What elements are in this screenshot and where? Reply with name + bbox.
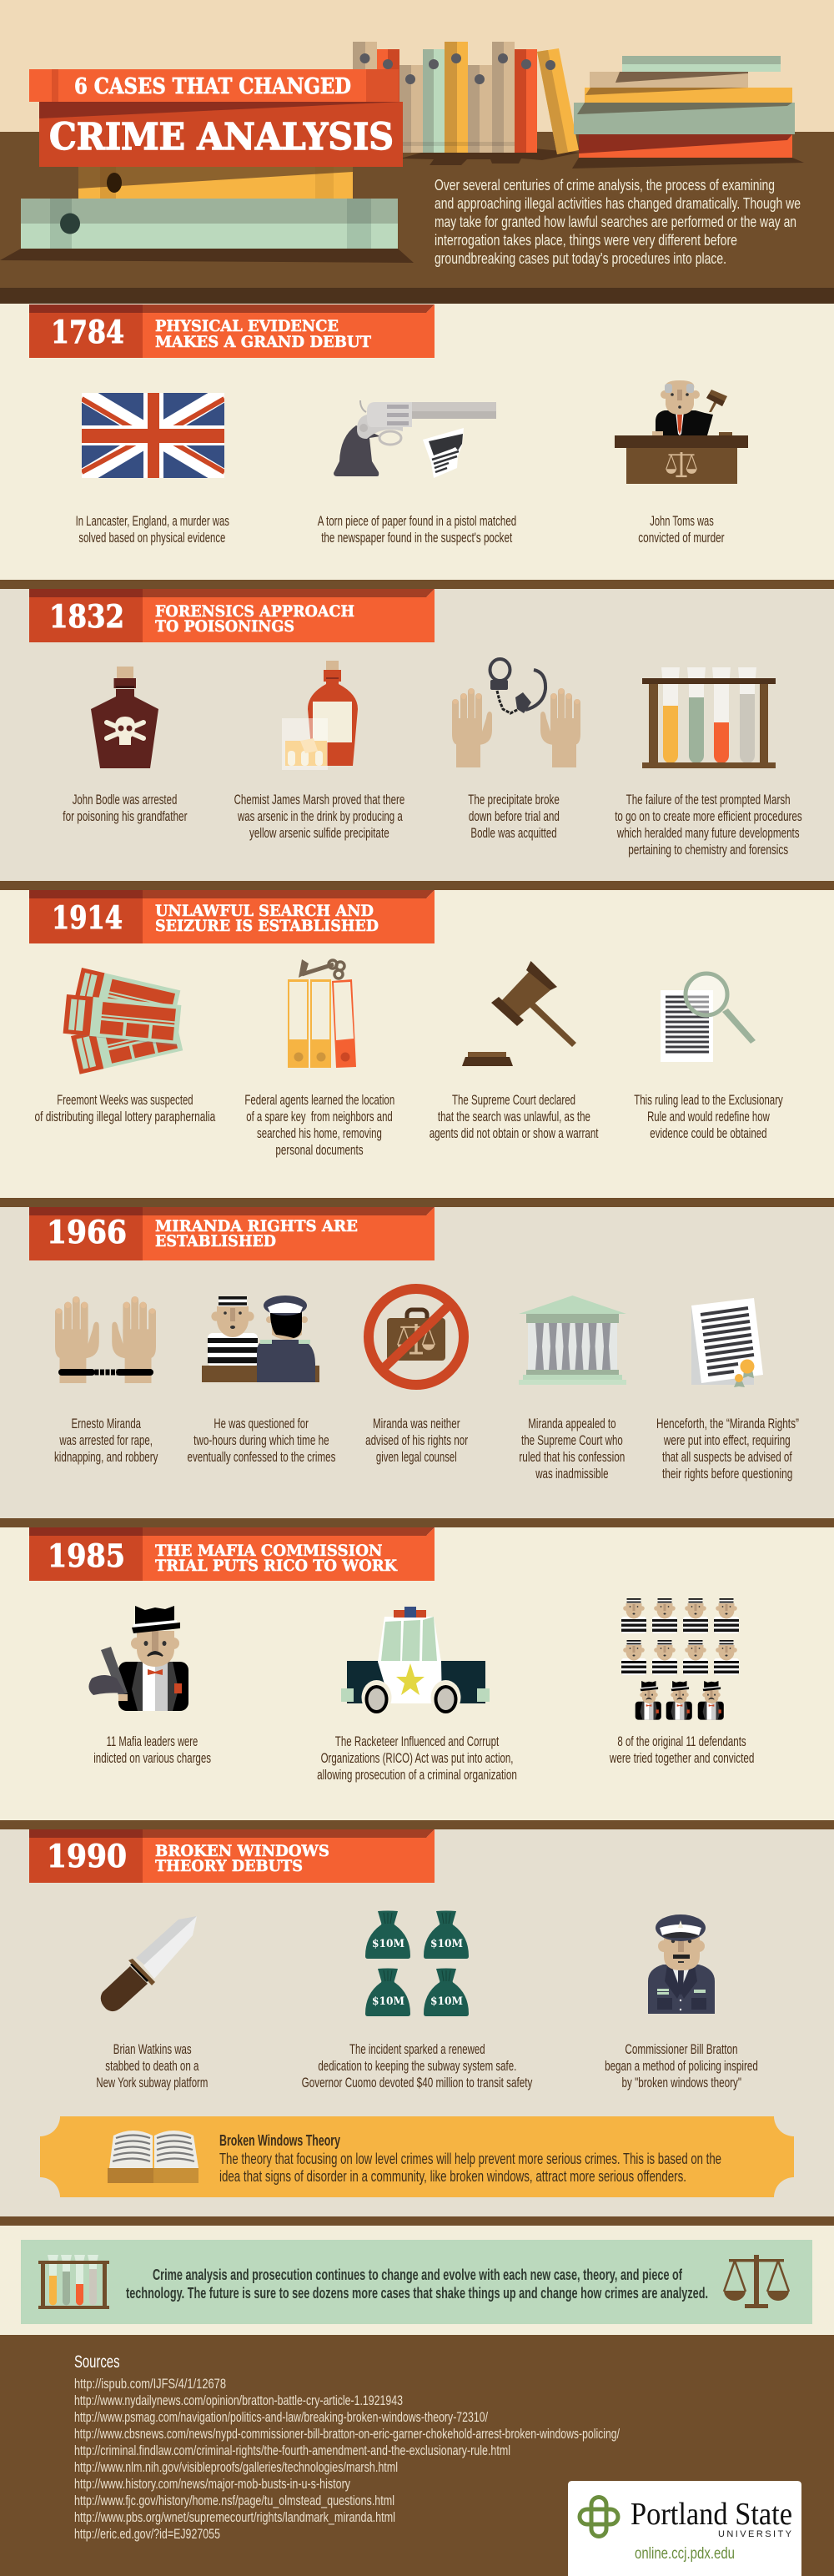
captions 1966: was arrested for rape,	[59, 1432, 153, 1448]
conclusion text	[126, 2267, 708, 2302]
icon: judge at bench	[615, 380, 748, 484]
captions 1914: The Supreme Court declared	[452, 1092, 575, 1108]
captions 1990: The incident sparked a renewed	[349, 2041, 485, 2057]
callout: Broken Windows Theory: Broken Windows Theory	[219, 2132, 340, 2149]
captions 1914: searched his home, removing	[257, 1125, 382, 1141]
heading: 1914: 1914	[52, 899, 123, 936]
captions 1832: was arsenic in the drink by producing a	[237, 808, 403, 824]
captions 1832: for poisoning his grandfather	[63, 808, 188, 824]
icon: test tubes rack	[642, 667, 776, 768]
captions 1985: The Racketeer Influenced and Corrupt	[335, 1733, 499, 1749]
captions 1990: New York subway platform	[96, 2075, 208, 2090]
panel: 1985	[0, 1527, 834, 1829]
icon: document and magnifier	[661, 974, 756, 1062]
heading: 1990: THEORY DEBUTS	[155, 1857, 303, 1875]
icon: stacked books right	[572, 56, 804, 169]
captions 1914: of distributing illegal lottery paraphernalia	[35, 1109, 216, 1124]
captions 1990: began a method of policing inspired	[605, 2058, 758, 2074]
captions 1966: advised of his rights nor	[365, 1432, 468, 1448]
icon: money bags: $10M	[430, 1995, 463, 2008]
heading: 1990	[29, 1829, 435, 1883]
sources list: http://www.pbs.org/wnet/supremecourt/rights/landmark_miranda.html	[74, 2510, 395, 2525]
icon: money bags	[365, 1910, 469, 2016]
captions 1966	[54, 1416, 799, 1482]
icon: signed document	[691, 1298, 763, 1387]
icon: poison bottle	[91, 667, 158, 768]
icon: defendants grid	[621, 1598, 739, 1720]
icon: gavel	[462, 961, 576, 1066]
captions 1966: was inadmissible	[535, 1466, 609, 1482]
sources list: http://www.history.com/news/major-mob-busts-in-u-s-history	[74, 2477, 351, 2492]
icon: mafia boss with gun	[88, 1606, 188, 1711]
heading: 1966: 1966	[47, 1214, 127, 1250]
icon: bottle and glass	[282, 661, 358, 770]
icon: knife	[101, 1916, 197, 2011]
panel: 1784	[0, 304, 834, 589]
captions 1784: convicted of murder	[638, 530, 725, 546]
heading: 1990: BROKEN WINDOWS	[155, 1842, 329, 1860]
icon: no legal counsel sign	[369, 1289, 464, 1385]
heading: 1914	[29, 890, 435, 943]
sources list: http://www.nlm.nih.gov/visibleproofs/galleries/technologies/marsh.html	[74, 2460, 398, 2475]
sources list: http://www.nydailynews.com/opinion/bratton-battle-cry-article-1.1921943	[74, 2393, 403, 2408]
icon: pistol and torn newspaper	[334, 400, 496, 478]
captions 1914: Rule and would redefine how	[647, 1109, 770, 1124]
panel: 1966	[0, 1207, 834, 1527]
icon: lottery tickets	[63, 968, 183, 1074]
panel: 1990	[0, 1829, 834, 2226]
title	[29, 69, 403, 167]
intro text	[435, 177, 801, 267]
captions 1966: Ernesto Miranda	[72, 1416, 141, 1431]
captions 1966: eventually confessed to the crimes	[187, 1449, 335, 1465]
captions 1914: Federal agents learned the location	[244, 1092, 394, 1108]
captions 1914: personal documents	[275, 1142, 364, 1158]
logo: Portland State University: UNIVERSITY	[718, 2529, 792, 2539]
captions 1914: that the search was unlawful, as the	[438, 1109, 590, 1124]
captions 1985: 8 of the original 11 defendants	[617, 1733, 746, 1749]
panel: 1832	[0, 589, 834, 890]
captions 1990: Brian Watkins was	[113, 2041, 192, 2057]
heading: 1784: PHYSICAL EVIDENCE	[155, 317, 339, 335]
captions 1985: Organizations (RICO) Act was put into action,	[321, 1750, 514, 1766]
heading: 1832: 1832	[49, 598, 124, 635]
sources list: Sources	[74, 2352, 120, 2372]
captions 1966: given legal counsel	[376, 1449, 457, 1465]
icon: open book	[108, 2131, 198, 2183]
intro text: interrogation takes place, things were very different before	[435, 232, 737, 249]
captions 1832: Chemist James Marsh proved that there	[234, 792, 404, 808]
heading: 1784	[29, 304, 435, 358]
sources list: http://www.psmag.com/navigation/politics-and-law/breaking-broken-windows-theory-72310/	[74, 2410, 488, 2425]
heading: 1784: MAKES A GRAND DEBUT	[155, 333, 371, 351]
intro text: groundbreaking cases put today's procedures into place.	[435, 250, 726, 267]
sources list: http://www.fjc.gov/history/home.nsf/page/tu_olmstead_questions.html	[74, 2493, 394, 2508]
captions 1990: Commissioner Bill Bratton	[625, 2041, 738, 2057]
captions 1966: He was questioned for	[214, 1416, 309, 1431]
sources list: http://www.cbsnews.com/news/nypd-commissioner-bill-bratton-on-eric-garner-chokehold-arrest-broken-windows-policing/	[74, 2427, 620, 2442]
icon: money bags: $10M	[372, 1995, 404, 2008]
icon: binders and key	[288, 959, 356, 1068]
heading: 1832	[29, 589, 435, 642]
icon: UK flag	[82, 393, 224, 478]
captions 1990: Governor Cuomo devoted $40 million to transit safety	[302, 2075, 533, 2090]
icon: stacked books left	[0, 167, 414, 263]
header panel	[0, 0, 834, 304]
captions 1990: dedication to keeping the subway system safe.	[318, 2058, 516, 2074]
heading: 1985: TRIAL PUTS RICO TO WORK	[155, 1557, 398, 1575]
logo: Portland State University: Portland State	[631, 2497, 792, 2532]
icon: knot emblem	[580, 2498, 618, 2536]
logo: Portland State University: online.ccj.pdx.edu	[635, 2545, 735, 2563]
sources list: http://criminal.findlaw.com/criminal-rights/the-fourth-amendment-and-the-exclusionary-rule.html	[74, 2443, 510, 2458]
icon: small test tubes	[38, 2255, 109, 2309]
panel: 1914	[0, 890, 834, 1207]
captions 1966: ruled that his confession	[519, 1449, 625, 1465]
captions 1966: Miranda was neither	[373, 1416, 460, 1431]
captions 1990: by "broken windows theory"	[622, 2075, 741, 2090]
callout: Broken Windows Theory: idea that signs of disorder in a community, like broken windows, attract more serious offenders.	[219, 2168, 686, 2185]
captions 1966: the Supreme Court who	[521, 1432, 623, 1448]
heading: 1966: ESTABLISHED	[155, 1232, 276, 1250]
heading: 1832: FORENSICS APPROACH	[155, 602, 354, 621]
captions 1832: Bodle was acquitted	[470, 825, 557, 841]
title: CRIME ANALYSIS	[49, 116, 394, 158]
captions 1784: solved based on physical evidence	[78, 530, 225, 546]
captions 1784	[76, 513, 725, 546]
captions 1966: two-hours during which time he	[193, 1432, 329, 1448]
icon: cuffed hands	[55, 1296, 156, 1383]
icon: money bags: $10M	[430, 1938, 463, 1950]
title: 6 CASES THAT CHANGED	[74, 74, 351, 99]
captions 1985: 11 Mafia leaders were	[107, 1733, 198, 1749]
icon: police car	[341, 1607, 490, 1715]
icon: money bags: $10M	[372, 1938, 404, 1950]
captions 1784: In Lancaster, England, a murder was	[76, 513, 229, 529]
captions 1832: down before trial and	[469, 808, 560, 824]
captions 1990	[96, 2041, 758, 2090]
captions 1966: Miranda appealed to	[528, 1416, 615, 1431]
heading: 1985	[29, 1527, 435, 1581]
captions 1784: John Toms was	[650, 513, 714, 529]
captions 1832: yellow arsenic sulfide precipitate	[249, 825, 389, 841]
panel: footer	[0, 2335, 834, 2576]
callout: Broken Windows Theory	[40, 2116, 794, 2197]
captions 1914: of a spare key from neighbors and	[246, 1109, 393, 1124]
heading: 1985: 1985	[48, 1537, 125, 1574]
sources list	[74, 2352, 620, 2542]
heading: 1832: TO POISONINGS	[155, 617, 294, 636]
captions 1990: stabbed to death on a	[105, 2058, 199, 2074]
heading: 1966: MIRANDA RIGHTS ARE	[155, 1217, 358, 1235]
captions 1832: John Bodle was arrested	[73, 792, 177, 808]
captions 1985: allowing prosecution of a criminal organization	[317, 1767, 517, 1783]
icon: scales of justice	[724, 2255, 789, 2308]
captions 1966: kidnapping, and robbery	[54, 1449, 158, 1465]
icon: hands and handcuffs	[452, 659, 580, 767]
captions 1985	[93, 1733, 754, 1783]
sources list: http://eric.ed.gov/?id=EJ927055	[74, 2527, 220, 2542]
sources list: http://ispub.com/IJFS/4/1/12678	[74, 2377, 226, 2392]
captions 1832	[63, 792, 802, 858]
icon: commissioner Bratton	[648, 1914, 715, 2014]
captions 1784: the newspaper found in the suspect's pocket	[321, 530, 512, 546]
captions 1985: were tried together and convicted	[609, 1750, 754, 1766]
heading: 1914: SEIZURE IS ESTABLISHED	[155, 917, 379, 935]
captions 1832: The precipitate broke	[468, 792, 560, 808]
panel: conclusion	[0, 2226, 834, 2335]
captions 1914: agents did not obtain or show a warrant	[430, 1125, 599, 1141]
captions 1914	[35, 1092, 783, 1158]
icon: supreme court	[519, 1296, 626, 1385]
heading: 1914: UNLAWFUL SEARCH AND	[155, 902, 374, 920]
logo: Portland State University	[568, 2481, 801, 2576]
captions 1784: A torn piece of paper found in a pistol matched	[318, 513, 516, 529]
icon: prisoner and officer	[202, 1296, 319, 1382]
heading: 1966	[29, 1207, 435, 1260]
heading: 1985: THE MAFIA COMMISSION	[155, 1542, 382, 1560]
heading: 1990: 1990	[47, 1838, 127, 1874]
captions 1914: evidence could be obtained	[650, 1125, 767, 1141]
heading: 1784: 1784	[51, 314, 124, 350]
captions 1914: Freemont Weeks was suspected	[57, 1092, 193, 1108]
captions 1985: indicted on various charges	[93, 1750, 211, 1766]
icon: standing books	[353, 42, 580, 165]
